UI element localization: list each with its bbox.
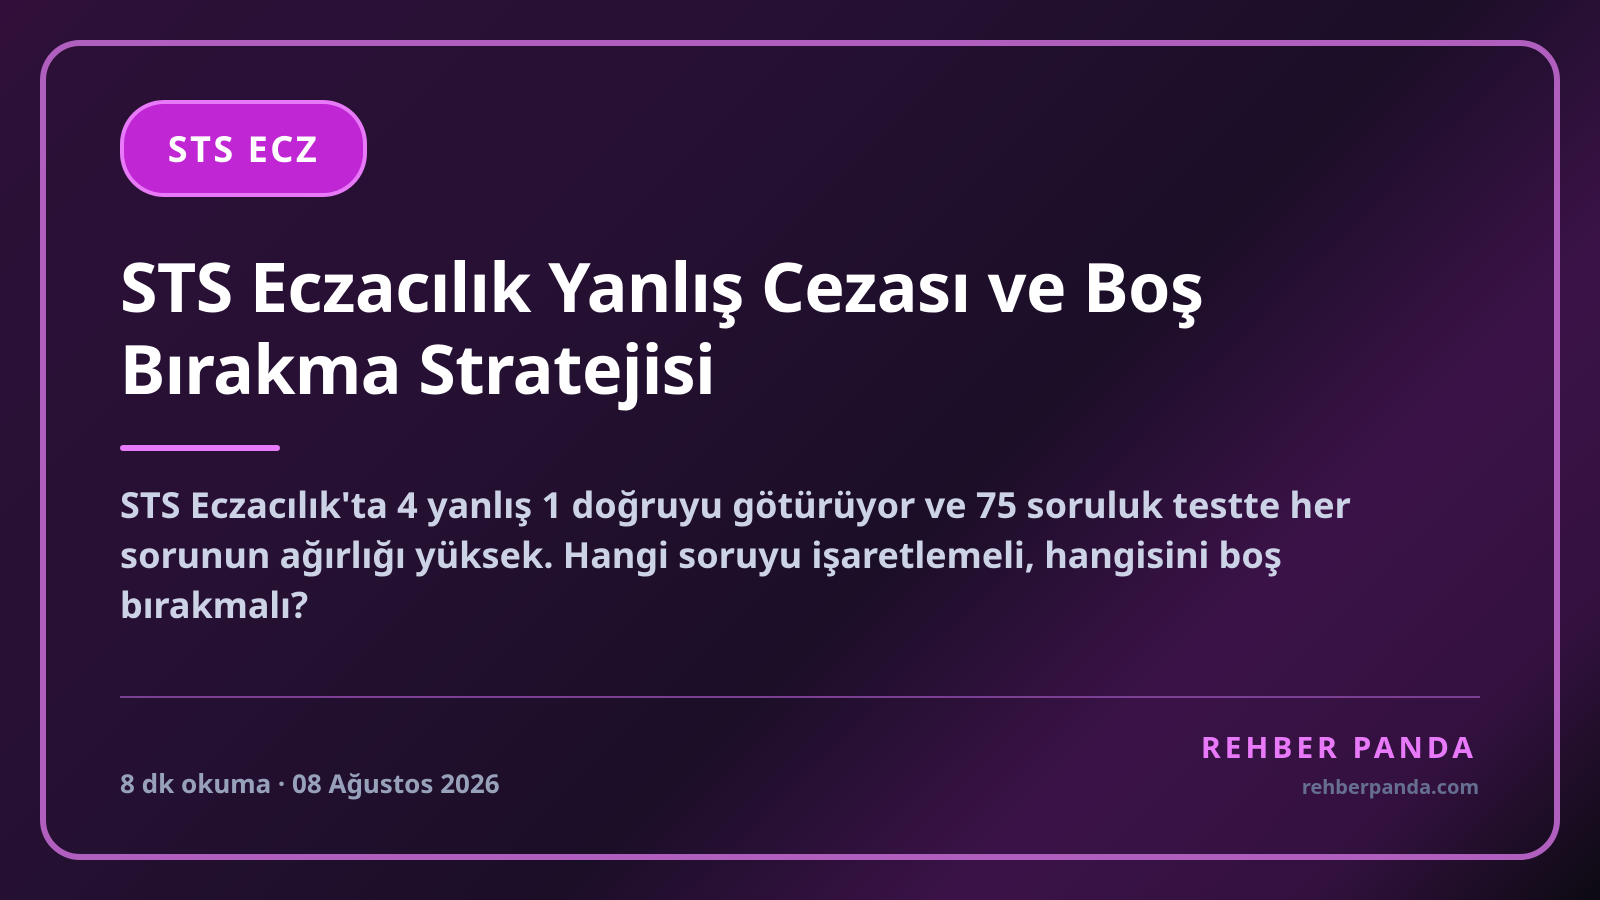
title: STS Eczacılık Yanlış Cezası ve Boş Bırakma Stratejisi (120, 239, 1204, 414)
badge: STS ECZ (120, 100, 367, 197)
badge: STS ECZ: STS ECZ (168, 124, 319, 173)
accent rule (120, 445, 280, 451)
subtitle: STS Eczacılık'ta 4 yanlış 1 doğruyu götürüyor ve 75 soruluk testte her sorunun ağırlığı yüksek. Hangi soruyu işaretlemeli, hangisini boş bırakmalı? (120, 480, 1351, 629)
footer divider (120, 696, 1480, 698)
reading time and date: 8 dk okuma · 08 Ağustos 2026 (120, 765, 500, 801)
brand name: REHBER PANDA (1201, 726, 1477, 767)
brand website: rehberpanda.com (1302, 773, 1479, 800)
